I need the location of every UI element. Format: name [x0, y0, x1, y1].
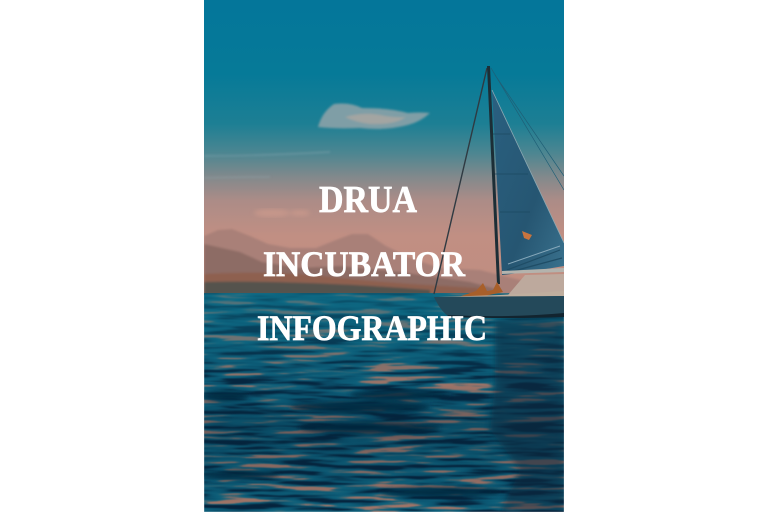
- cabin: [508, 274, 564, 295]
- crew: [460, 282, 503, 296]
- photo background: [200, 0, 564, 512]
- boom: [502, 268, 564, 274]
- title: INCUBATOR: INCUBATOR: [263, 244, 466, 284]
- cloud: [205, 102, 430, 157]
- sky: [204, 0, 564, 295]
- sail patch: [522, 231, 532, 240]
- sea shading: [204, 293, 564, 512]
- sea: [204, 293, 564, 512]
- mountains: [204, 229, 520, 294]
- deck: [439, 294, 564, 297]
- rigging: [434, 68, 487, 294]
- sailboat: [434, 66, 564, 318]
- dark water swells: [200, 390, 500, 497]
- title: DRUA: DRUA: [319, 179, 417, 221]
- mainsail: [492, 90, 564, 275]
- mast: [487, 66, 500, 284]
- boat reflection: [490, 320, 564, 512]
- hull: [434, 296, 564, 317]
- poster: sailboat photo with title: [204, 0, 564, 512]
- title: INFOGRAPHIC: INFOGRAPHIC: [257, 308, 487, 348]
- distant clouds: [254, 209, 310, 217]
